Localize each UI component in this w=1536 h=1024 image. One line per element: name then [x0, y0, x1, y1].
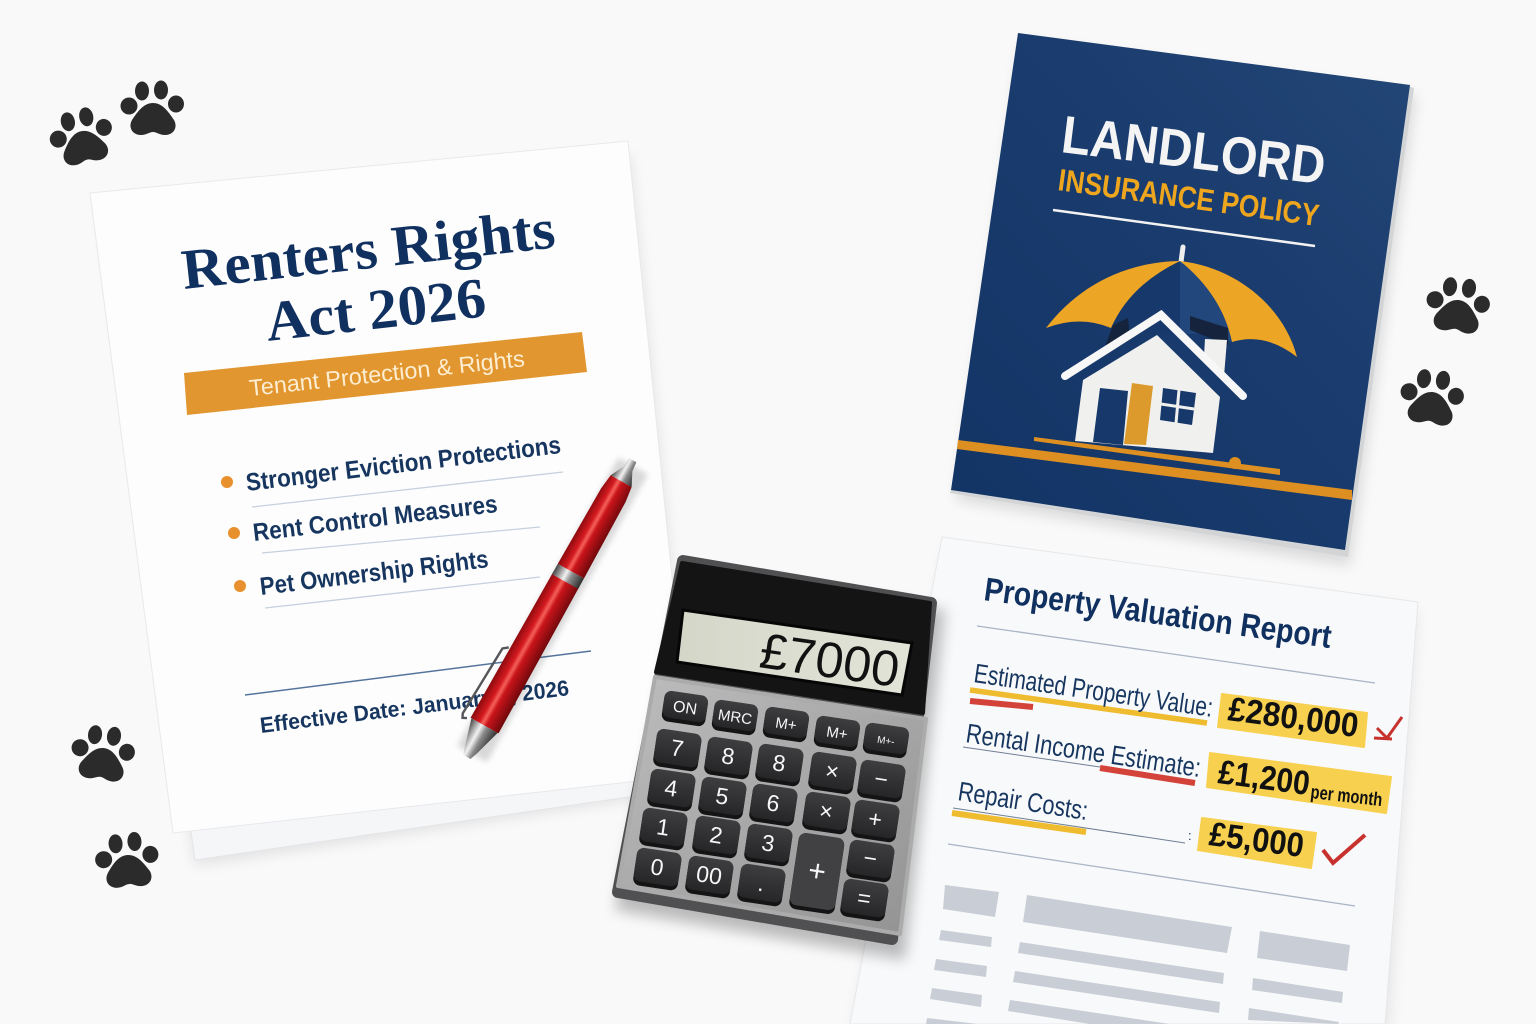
document: Property Valuation Report: [850, 537, 1418, 1024]
calculator keys: M+: [825, 724, 849, 744]
paw prints: right side: [1397, 273, 1493, 428]
heading: Renters Rights Act 2026: Act 2026: [262, 266, 489, 354]
report heading: Property Valuation Report: [982, 570, 1334, 655]
calculator keys: +: [867, 805, 884, 833]
booklet title: INSURANCE POLICY: [1056, 162, 1322, 233]
ground lines: [957, 437, 1352, 500]
heading: Renters Rights Act 2026: Renters Rights: [178, 198, 558, 302]
calculator keys: =: [856, 884, 873, 912]
icon: house: [1065, 315, 1243, 453]
row: rental income estimate: £1,200: [1216, 753, 1312, 803]
row: estimated property value: £280,000: [1226, 690, 1361, 745]
heading: Renters Rights Act 2026: [178, 198, 558, 354]
row: rental income estimate: [963, 718, 1391, 813]
calculator display: £7000: [756, 622, 903, 698]
banner: Tenant Protection & Rights: Tenant Protection & Rights: [248, 345, 526, 401]
calculator keys: −: [873, 765, 890, 793]
row: repair costs: [952, 776, 1365, 868]
bullet list: Stronger Eviction Protections: [244, 431, 562, 497]
calculator keys: −: [862, 844, 879, 872]
pen clip: [461, 644, 509, 721]
calculator keys: 4: [663, 774, 680, 802]
row: rental income estimate: Rental Income Estimate:: [964, 718, 1203, 783]
calculator keys: 0: [649, 853, 665, 881]
bullet list: Pet Ownership Rights: [258, 545, 490, 601]
calculator body: [618, 561, 931, 939]
paw prints: bottom left: [68, 721, 161, 889]
red pen: [445, 448, 650, 767]
calculator keys: 7: [669, 734, 685, 762]
row: repair costs: £5,000: [1207, 815, 1306, 865]
calculator keys: 00: [695, 860, 724, 890]
booklet title: [1053, 105, 1329, 246]
icon: umbrella: [1046, 247, 1297, 357]
calculator keys: 3: [760, 829, 776, 857]
calculator display: [677, 610, 912, 698]
paw prints: top left: [45, 80, 184, 169]
calculator keys: [632, 690, 910, 922]
effective date: Effective Date: January 1, 2026: [259, 675, 570, 738]
calculator keys: M+-: [876, 735, 895, 748]
document: Renters Rights Act: [90, 141, 694, 866]
page edges: [950, 85, 1414, 557]
row: rental income estimate: per month: [1309, 782, 1383, 811]
row: estimated property value: [970, 658, 1402, 747]
calculator keys: 8: [771, 749, 787, 777]
effective date: [245, 651, 591, 738]
calculator keys: ×: [824, 757, 841, 785]
booklet title: LANDLORD: [1059, 105, 1329, 196]
placeholder table: [926, 885, 1350, 1024]
calculator keys: .: [756, 870, 766, 896]
calculator keys: MRC: [717, 707, 753, 728]
calculator keys: 8: [720, 742, 736, 770]
banner: Tenant Protection & Rights: [184, 332, 587, 415]
bullet list: [221, 431, 563, 608]
bullet list: Rent Control Measures: [251, 490, 499, 547]
calculator keys: M+: [774, 715, 798, 735]
main sheet: [90, 141, 692, 833]
calculator keys: 6: [765, 789, 781, 817]
calculator keys: 5: [714, 782, 730, 810]
row: repair costs: Repair Costs:: [956, 776, 1090, 826]
booklet: Landlord Insurance Policy: [950, 33, 1416, 566]
calculator keys: ×: [818, 797, 835, 825]
calculator keys: ON: [672, 698, 698, 719]
row: estimated property value: Estimated Property Value:: [972, 658, 1215, 723]
row: repair costs: :: [1188, 828, 1192, 843]
calculator: [615, 561, 945, 960]
calculator keys: 2: [708, 821, 724, 849]
calculator keys: +: [806, 854, 828, 889]
calculator keys: 1: [655, 813, 671, 841]
under sheet: [130, 400, 690, 860]
